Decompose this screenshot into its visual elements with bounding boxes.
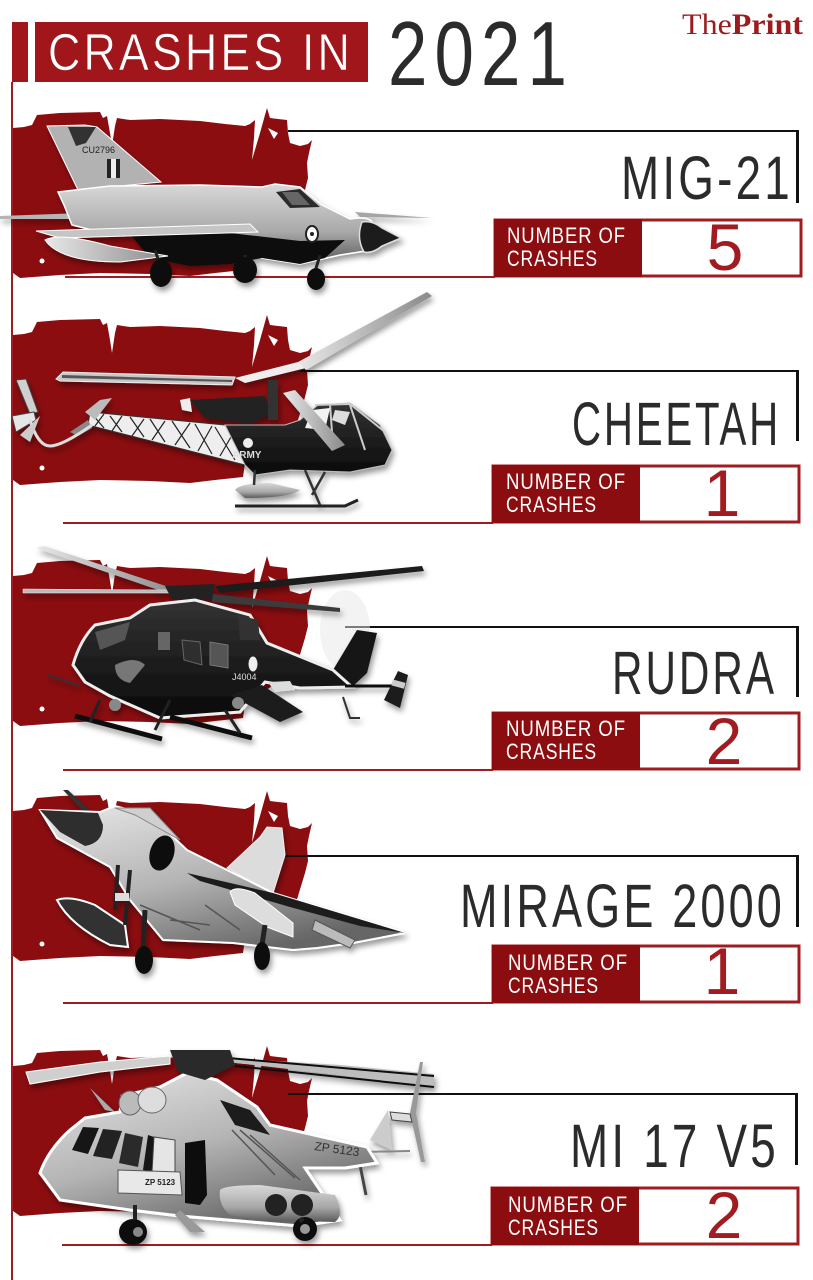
stat box: 1	[704, 456, 740, 530]
stat box	[491, 1178, 798, 1252]
stat box: CRASHES	[507, 246, 598, 271]
connector lines	[63, 855, 799, 1004]
connector lines	[63, 370, 799, 524]
stat box	[494, 210, 801, 284]
stat box: NUMBER OF	[506, 469, 626, 494]
stat box: NUMBER OF	[508, 950, 628, 975]
aircraft: Mi 17 helicopter: ZP 5123	[145, 1178, 176, 1187]
stat box	[492, 456, 799, 530]
stat box: 2	[706, 1178, 742, 1252]
stat box: NUMBER OF	[506, 716, 626, 741]
serial: CU2796	[82, 145, 115, 155]
aircraft: Mi 17 helicopter: ZP 5123	[314, 1139, 361, 1159]
panel: Cheetah	[12, 292, 799, 530]
connector lines	[62, 1093, 798, 1246]
panel: Mi 17 V5	[13, 1046, 798, 1252]
logo: ThePrint: ThePrint	[682, 8, 803, 41]
stat box: CRASHES	[508, 973, 599, 998]
paint brush background	[13, 791, 312, 961]
stat box: NUMBER OF	[508, 1192, 628, 1217]
paint brush background	[13, 1046, 312, 1216]
title year: 2021	[388, 4, 574, 105]
aircraft: Mi 17 helicopter	[26, 1050, 434, 1245]
stat box: 2	[706, 704, 742, 778]
paint brush background	[13, 315, 312, 485]
paint brush background	[13, 556, 312, 726]
panel: Mirage 2000	[13, 790, 799, 1008]
left vertical rule	[11, 82, 13, 1280]
header	[12, 4, 803, 105]
header accent bar	[12, 22, 28, 82]
aircraft: Rudra helicopter: J4004	[232, 672, 257, 682]
stat box: CRASHES	[506, 739, 597, 764]
connector lines	[65, 130, 799, 278]
stat box	[492, 704, 799, 778]
aircraft: Cheetah helicopter	[12, 292, 432, 506]
connector lines	[63, 626, 799, 771]
title banner: CRASHES IN	[48, 24, 353, 82]
panel: Rudra	[13, 546, 799, 778]
aircraft: Cheetah helicopter: ARMY	[232, 450, 262, 461]
stat box: 5	[707, 210, 743, 284]
aircraft: Rudra helicopter	[23, 546, 424, 739]
stat box	[492, 934, 799, 1008]
panel: MiG-21	[0, 108, 801, 290]
stat box: NUMBER OF	[507, 223, 626, 248]
stat box: 1	[704, 934, 740, 1008]
stat box: CRASHES	[508, 1215, 599, 1240]
aircraft: Mirage 2000 jet	[40, 790, 405, 974]
aircraft: MiG-21 jet	[0, 125, 432, 290]
paint brush background	[13, 108, 312, 278]
stat box: CRASHES	[506, 492, 597, 517]
